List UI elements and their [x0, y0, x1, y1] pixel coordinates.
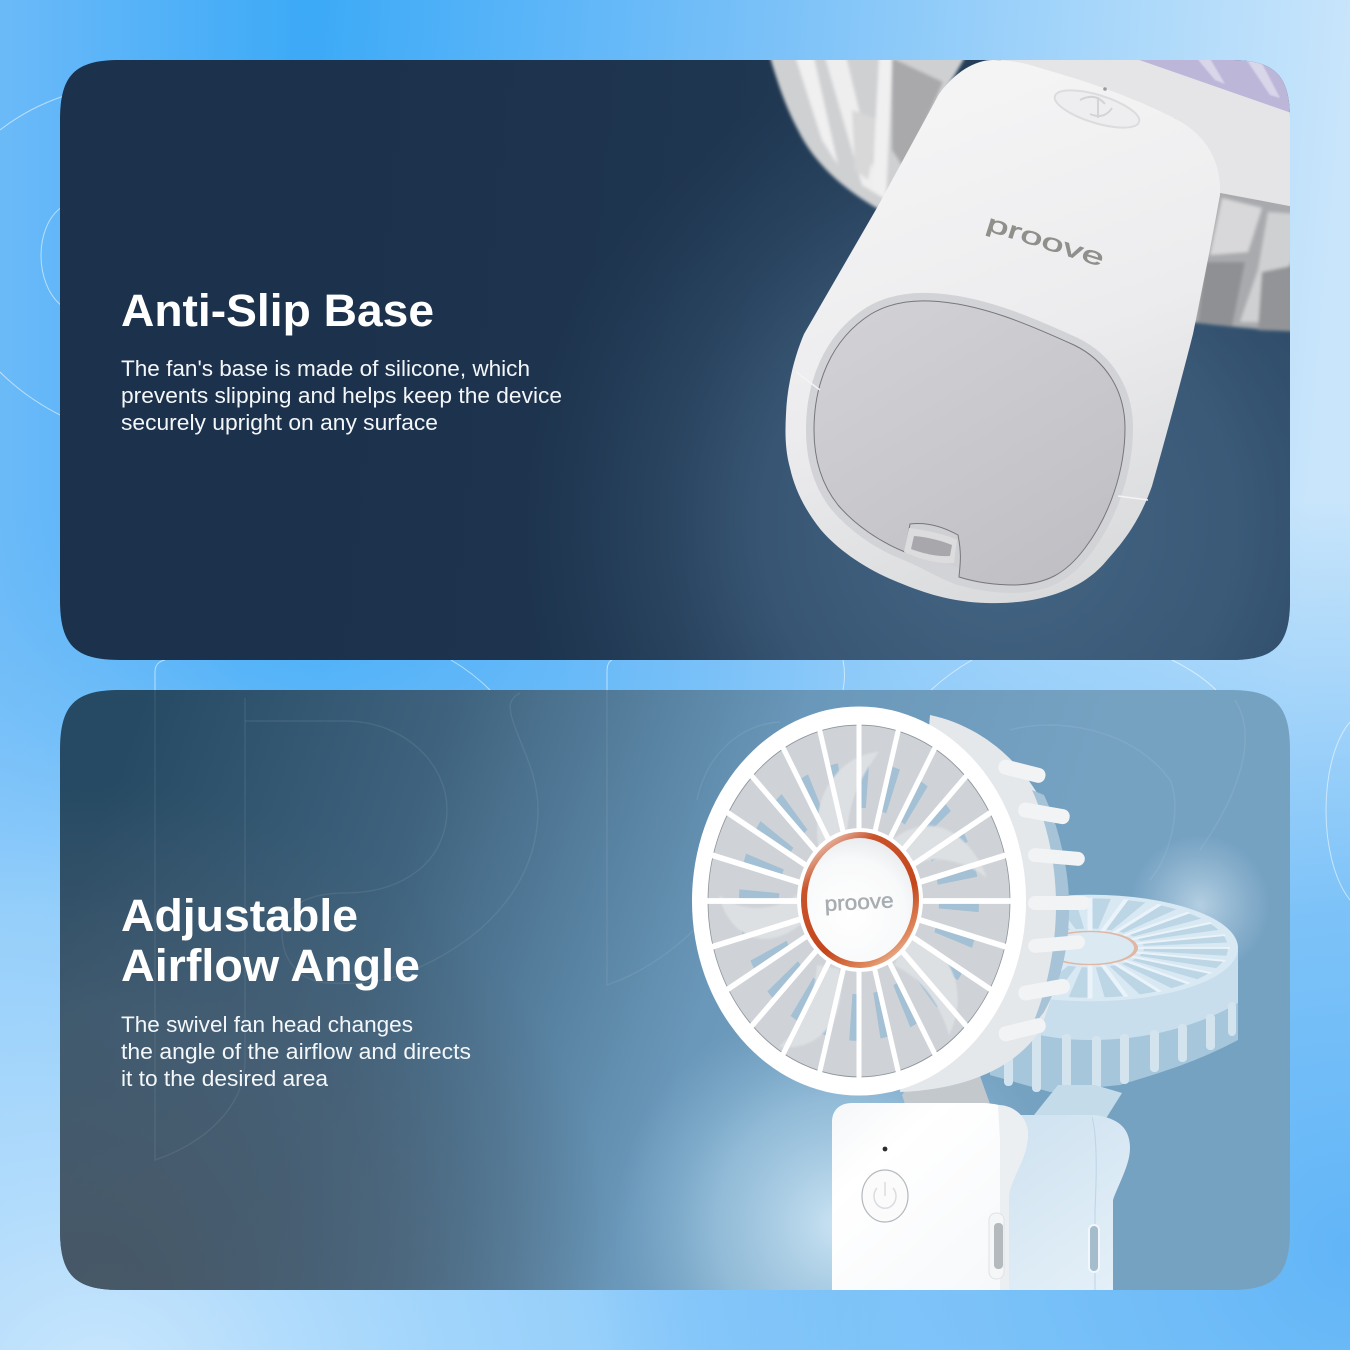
- see-through air gaps: [759, 784, 959, 1018]
- description: prevents slipping and helps keep the device: [121, 383, 562, 408]
- heading: Airflow Angle: [121, 940, 420, 991]
- ghost handle: [1000, 1115, 1130, 1290]
- base cover outer ring: [814, 301, 1125, 585]
- white fan rim band: [1000, 60, 1290, 206]
- fan cage behind the body, left: [768, 60, 966, 210]
- center hub with copper ring: [797, 828, 923, 972]
- fan handle body: [785, 60, 1220, 603]
- background outline logo lines: [0, 96, 1350, 900]
- main fan: upright position: [692, 706, 1090, 1290]
- description: it to the desired area: [121, 1066, 329, 1091]
- panel background: [60, 40, 1290, 660]
- rear cage with ribs: [900, 715, 1090, 1092]
- brand wordmark on body: proove: [983, 210, 1108, 272]
- description: The fan's base is made of silicone, which: [121, 356, 530, 381]
- seam marks: [812, 383, 1148, 501]
- silicone base cover: [814, 301, 1125, 585]
- description: The swivel fan head changes: [121, 1012, 413, 1037]
- ghost fan side band: [1040, 950, 1238, 1040]
- ghost fan: tilted position: [942, 830, 1290, 1290]
- USB port: [989, 1213, 1004, 1279]
- description: the angle of the airflow and directs: [121, 1039, 471, 1064]
- description: securely upright on any surface: [121, 410, 438, 435]
- power button recess: [1054, 87, 1140, 128]
- ghost fan neck: [1034, 1085, 1122, 1118]
- fan face: [692, 706, 1026, 1096]
- fan neck: [902, 1076, 990, 1104]
- panel background: [60, 690, 1290, 1290]
- description: [121, 356, 562, 435]
- panel: anti-slip base: [60, 40, 1310, 660]
- radial grille spokes: [707, 724, 1011, 1078]
- panel: adjustable airflow angle: [60, 690, 1290, 1290]
- ghost USB port: [1089, 1225, 1099, 1272]
- fan cage behind the body, right: [1195, 193, 1290, 334]
- power button: [862, 1170, 908, 1222]
- handle side shade: [998, 1105, 1028, 1290]
- cover notch: [904, 528, 957, 563]
- lilac fan interior, top right: [1140, 60, 1290, 117]
- indicator dot: [883, 1147, 887, 1151]
- outer rim: [692, 706, 1026, 1096]
- handle: [832, 1103, 1028, 1290]
- fan blades: [719, 752, 987, 1047]
- faint logo outlines in panel: [155, 690, 1245, 1160]
- hub wordmark: proove: [824, 889, 894, 916]
- ghost handle seam: [1092, 1117, 1096, 1290]
- heading: [121, 890, 420, 991]
- heading: Adjustable: [121, 890, 358, 941]
- ghost fan ribs: [985, 1003, 1238, 1092]
- ghost fan face: [1051, 894, 1238, 1001]
- description: [121, 1012, 471, 1091]
- heading: Anti-Slip Base: [121, 285, 434, 336]
